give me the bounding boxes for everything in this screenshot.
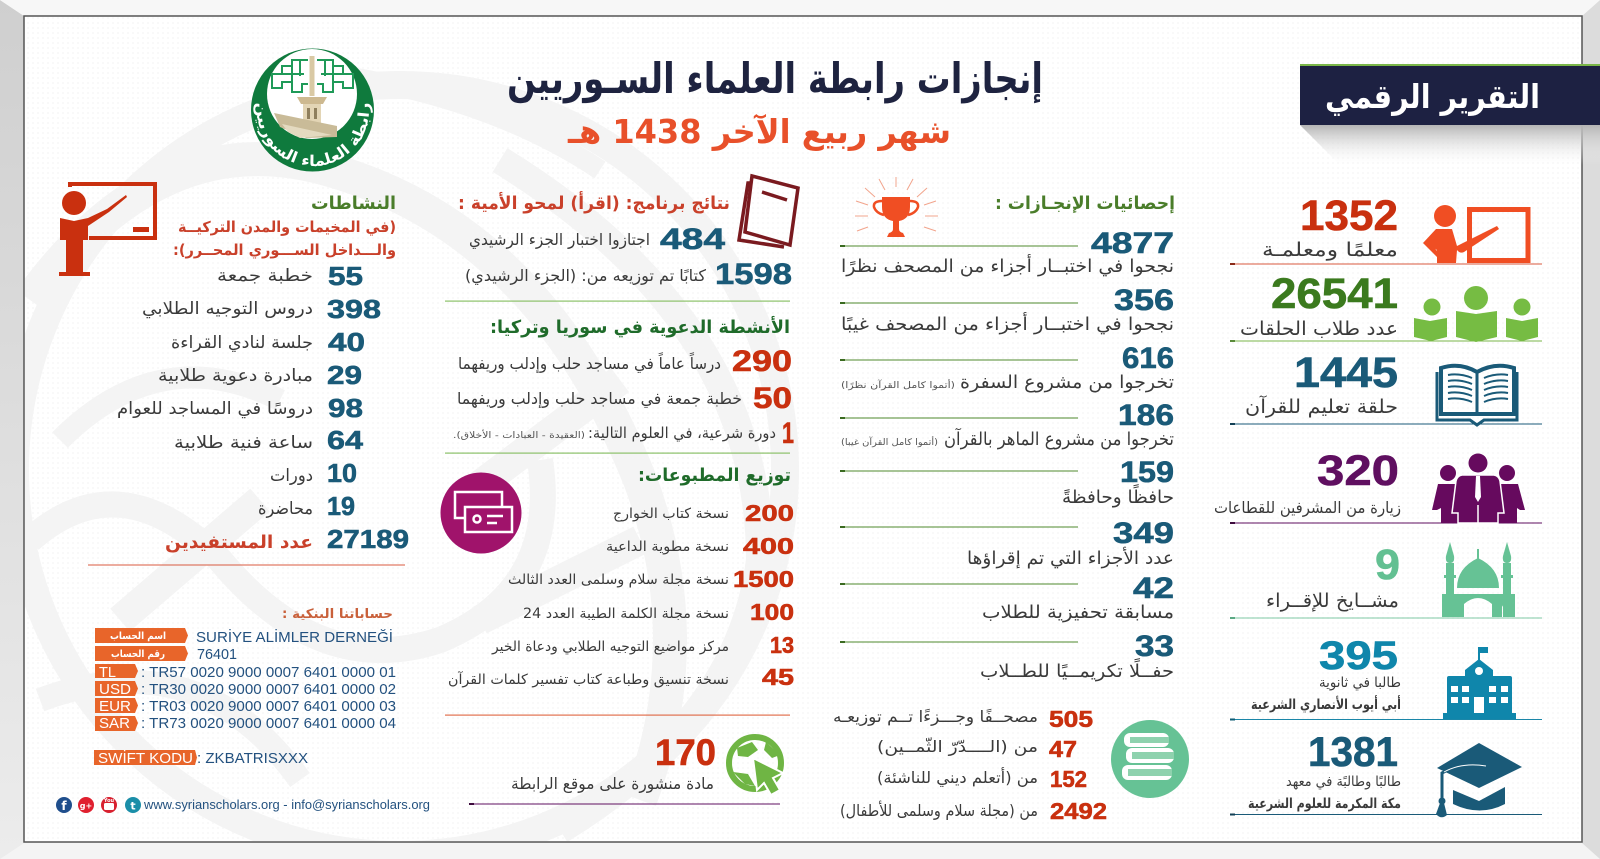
IBAN SAR: : TR73 0020 9000 0007 6401 0000 04 xyxy=(141,715,396,732)
panel: outreach activities xyxy=(445,316,794,454)
IBAN EUR: : TR03 0020 9000 0007 6401 0000 03 xyxy=(141,698,396,715)
row 400 xyxy=(606,533,794,559)
icon: google plus xyxy=(78,797,94,813)
row 2492: 2492 xyxy=(1050,798,1107,824)
row 1598 xyxy=(465,258,792,291)
row 45 xyxy=(448,664,794,690)
IBAN TL: : TR57 0020 9000 0007 6401 0000 01 xyxy=(141,664,396,681)
row 2492 xyxy=(840,798,1107,824)
row 186: 186 xyxy=(1118,399,1174,432)
row 10: 10 xyxy=(327,458,357,488)
panel: key figures (right column) xyxy=(1214,192,1542,817)
row 290: 290 xyxy=(732,345,792,378)
stat: institute students: طالبًا وطالبًة في معهد xyxy=(1286,774,1401,790)
panel: website articles: مادة منشورة على موقع الرابطة xyxy=(511,774,714,794)
row 42 xyxy=(840,572,1174,623)
row 4877: نجحوا في اختبــار أجزاء من المصحف نظرًا xyxy=(841,254,1174,277)
row 1: دورة شرعية، في العلوم التالية: xyxy=(588,424,776,443)
row 45: نسخة تنسيق وطباعة كتاب تفسير كلمات القرآن xyxy=(448,671,729,688)
row 29: 29 xyxy=(327,360,362,390)
row 1500 xyxy=(508,566,794,592)
IBAN EUR: EUR xyxy=(99,698,131,715)
stat: teachers: 1352 xyxy=(1300,192,1398,240)
icon: cards xyxy=(440,472,522,554)
row 4877: 4877 xyxy=(1091,227,1174,260)
row 349: 349 xyxy=(1113,517,1174,550)
heading: نتائج برنامج: (اقرأ) لمحو الأمية : xyxy=(458,191,730,214)
row 98 xyxy=(117,393,363,423)
icon: twitter: t xyxy=(130,800,136,812)
row 55: خطبة جمعة xyxy=(217,266,313,286)
panel: literacy program results xyxy=(445,176,798,302)
stat: Quran circles xyxy=(1230,349,1542,425)
account name value: SURİYE ALİMLER DERNEĞİ xyxy=(196,628,393,646)
badge: account name xyxy=(95,628,188,643)
icon: youtube xyxy=(101,797,117,813)
row 200: 200 xyxy=(745,500,794,526)
row 100: نسخة مجلة الكلمة الطيبة العدد 24 xyxy=(523,606,729,622)
icon: facebook xyxy=(56,797,72,813)
row 484 xyxy=(469,223,725,256)
banner: digital report xyxy=(1300,64,1600,165)
badge: account number: رقم الحساب xyxy=(111,649,165,660)
row 349: عدد الأجزاء التي تم إقراؤها xyxy=(967,547,1174,569)
row 29: مبادرة دعوية طلابية xyxy=(158,366,313,386)
row 10: دورات xyxy=(270,466,313,486)
panel: activities xyxy=(59,182,409,566)
row 13: 13 xyxy=(770,632,794,658)
row 1598: كتابًا تم توزيعه من: (الجزء الرشيدي) xyxy=(465,266,706,286)
stat: students: عدد طلاب الحلقات xyxy=(1240,318,1398,340)
row 349 xyxy=(840,517,1174,569)
row 98: دروسًا في المساجد للعوام xyxy=(117,399,313,419)
row 290 xyxy=(458,345,792,378)
row 616: 616 xyxy=(1122,342,1174,375)
row 1500: نسخة مجلة سلام وسلمى العدد الثالث xyxy=(508,572,729,588)
IBAN USD: USD xyxy=(99,681,131,698)
heading: إحصائيات الإنجـازات : xyxy=(995,193,1175,214)
icon: readers xyxy=(1414,286,1538,342)
row 33: 33 xyxy=(1135,630,1174,663)
row 186: (أتموا كامل القرآن غيبا) xyxy=(841,436,938,448)
row 50: خطبة جمعة في مساجد حلب وإدلب وريفهما xyxy=(457,389,742,409)
row 47: 47 xyxy=(1049,736,1077,762)
SWIFT code: : ZKBATRISXXX xyxy=(197,750,308,767)
row 27189 beneficiaries: 27189 xyxy=(327,524,409,554)
icon: facebook: f xyxy=(61,799,67,813)
banner: digital report: التقرير الرقمي xyxy=(1325,77,1540,117)
row 10 xyxy=(270,458,357,488)
row 100 xyxy=(523,599,794,625)
row 186: تخرجوا من مشروع الماهر بالقرآن xyxy=(944,427,1174,450)
heading: توزيع المطبوعات: xyxy=(638,465,791,486)
icon: twitter xyxy=(125,797,141,813)
icon: youtube: You xyxy=(103,798,115,804)
row 42: 42 xyxy=(1133,572,1174,605)
stat: high school students: 395 xyxy=(1319,634,1398,678)
stat: sheikhs: مشــايخ للإقــراء xyxy=(1266,590,1399,612)
icon: school xyxy=(1443,647,1516,719)
row 356: نجحوا في اختبــار أجزاء من المصحف غيبًا xyxy=(841,312,1174,335)
row 356: 356 xyxy=(1114,284,1174,317)
row 64: 64 xyxy=(327,425,364,455)
row 1: (العقيدة - العبادات - الأخلاق). xyxy=(453,429,585,441)
row 398: 398 xyxy=(327,294,381,324)
row 484: 484 xyxy=(660,223,725,256)
IBAN SAR: SAR xyxy=(99,715,130,732)
row 400: نسخة مطوية الداعية xyxy=(606,539,729,555)
panel: bank accounts xyxy=(94,607,396,767)
row 13 xyxy=(491,632,794,658)
row 200 xyxy=(613,500,794,526)
row 1: 1 xyxy=(782,417,794,450)
panel: website articles: 170 xyxy=(655,732,716,773)
row 4877 xyxy=(840,227,1174,277)
row 19: 19 xyxy=(327,491,355,521)
row 47 xyxy=(877,736,1077,762)
row 33 xyxy=(840,630,1174,682)
icon: teacher at board xyxy=(1423,205,1530,263)
row 55 xyxy=(217,261,363,291)
stat: students xyxy=(1230,270,1542,342)
row 50 xyxy=(457,382,792,415)
row 42: مسابقة تحفيزية للطلاب xyxy=(982,602,1174,623)
stat: Quran circles: حلقة تعليم للقرآن xyxy=(1245,394,1398,418)
stat: high school students: طالبا في ثانوية xyxy=(1319,675,1401,691)
row 64: ساعة فنية طلابية xyxy=(174,433,313,453)
title: إنجازات رابطة العلماء السـوريين xyxy=(507,54,1043,104)
panel: website articles xyxy=(469,732,780,805)
row 290: درساً عاماً في مساجد حلب وإدلب وريفهما xyxy=(458,351,721,374)
row 40 xyxy=(171,327,365,357)
stat: students: 26541 xyxy=(1271,270,1398,318)
stat: teachers xyxy=(1230,192,1542,265)
watermark xyxy=(15,70,785,855)
icon: open book xyxy=(1437,366,1517,425)
row 33: حفــلًا تكريمــيًا للطــلاب xyxy=(980,658,1174,682)
icon: graduation cap xyxy=(1436,743,1522,817)
panel: Quran distribution xyxy=(833,706,1189,824)
subtitle: شهر ربيع الآخر 1438 هـ xyxy=(567,112,951,152)
row 159 xyxy=(840,456,1174,508)
row 616: تخرجوا من مشروع السفرة xyxy=(960,372,1174,393)
stat: supervisor visits xyxy=(1214,447,1542,524)
icon: google plus: g+ xyxy=(80,802,92,810)
heading: الأنشطة الدعوية في سوريا وتركيا: xyxy=(490,316,790,338)
row 27189 beneficiaries: عدد المستفيدين xyxy=(165,532,313,553)
row 40: 40 xyxy=(328,327,365,357)
row 98: 98 xyxy=(328,393,363,423)
subheading: (في المخيمات والمدن التركيــة xyxy=(178,218,396,236)
row 2492: من (مجلة سلام وسلمى للأطفال) xyxy=(840,800,1038,821)
row 13: مركز مواضيع التوجيه الطلابي ودعاة الخير xyxy=(491,639,729,655)
row 47: من (الــــدّرّ الثّمــين) xyxy=(877,736,1038,757)
badge: account name: اسم الحساب xyxy=(110,631,166,642)
subheading line 2: والـــداخل الســـوري المحــرر): xyxy=(173,241,396,260)
stat: sheikhs xyxy=(1230,541,1542,619)
stat: institute students: 1381 xyxy=(1308,728,1398,775)
stat: Quran circles: 1445 xyxy=(1294,349,1398,397)
row 159: حافظًا وحافظةً xyxy=(1062,484,1174,508)
row 40: جلسة لنادي القراءة xyxy=(171,333,313,353)
stat: high school students xyxy=(1230,634,1542,720)
row 505 xyxy=(833,706,1093,732)
row 159: 159 xyxy=(1120,456,1174,489)
row 152 xyxy=(877,766,1087,792)
heading: حساباتنا البنكية : xyxy=(282,607,393,622)
row 19: محاضرة xyxy=(258,499,313,519)
row 356 xyxy=(840,284,1174,335)
icon: trophy xyxy=(855,177,938,237)
icon: teacher with pointer xyxy=(59,182,157,276)
row 484: اجتازوا اختبار الجزء الرشيدي xyxy=(469,230,650,250)
row 27189 beneficiaries xyxy=(165,524,409,554)
SWIFT code xyxy=(94,749,308,767)
social icons and contact xyxy=(56,797,430,813)
stat: supervisor visits: زيارة من المشرفين للقطاعات xyxy=(1214,498,1401,518)
row 398 xyxy=(142,294,381,324)
row 398: دروس التوجيه الطلابي xyxy=(142,299,313,319)
row 45: 45 xyxy=(762,664,794,690)
row 152: 152 xyxy=(1050,766,1087,792)
icon: group of people xyxy=(1432,454,1525,523)
SWIFT code: SWİFT KODU xyxy=(98,749,193,767)
heading: النشاطات xyxy=(311,193,396,214)
icon: globe with cursor xyxy=(729,737,783,795)
stat: supervisor visits: 320 xyxy=(1317,447,1399,495)
row 1 xyxy=(453,417,794,450)
IBAN TL: TL xyxy=(99,664,116,681)
row 50: 50 xyxy=(753,382,792,415)
stat: teachers: معلمًا ومعلمـة xyxy=(1262,239,1398,261)
row 186 xyxy=(840,399,1174,450)
panel: printed materials xyxy=(440,465,794,716)
panel: achievements statistics xyxy=(840,177,1175,682)
icon: notebook xyxy=(739,176,798,247)
stat: high school students: أبي أيوب الأنصاري الشرعية xyxy=(1251,695,1401,714)
IBAN USD: : TR30 0020 9000 0007 6401 0000 02 xyxy=(141,681,396,698)
row 152: من (أتعلم ديني للناشئة) xyxy=(877,767,1038,788)
row 1500: 1500 xyxy=(733,566,794,592)
row 100: 100 xyxy=(750,599,794,625)
contact text: www.syrianscholars.org - info@syrianscholars.org xyxy=(143,797,430,812)
row 55: 55 xyxy=(328,261,363,291)
minaret and roof xyxy=(274,56,337,138)
stat: institute students: مكة المكرمة للعلوم الشرعية xyxy=(1248,796,1401,812)
account number value: 76401 xyxy=(197,646,237,663)
tree xyxy=(272,60,353,92)
row 616: (أتموا كامل القرآن نظرًا) xyxy=(841,379,955,391)
row 505: 505 xyxy=(1049,706,1093,732)
icon: stack of books xyxy=(1111,720,1189,798)
row 505: مصحــفًا وجـــزءًا تــم توزيعـه xyxy=(833,707,1038,727)
row 1598: 1598 xyxy=(715,258,792,291)
stat: institute students xyxy=(1230,728,1542,816)
logo calligraphy: رابطة العلماء السوريين xyxy=(253,104,373,166)
row 400: 400 xyxy=(743,533,794,559)
row 616 xyxy=(840,342,1174,393)
row 64 xyxy=(174,425,364,455)
badge: account number xyxy=(95,646,188,661)
logo xyxy=(251,48,374,172)
row 19 xyxy=(258,491,355,521)
icon: mosque xyxy=(1442,542,1515,617)
row 200: نسخة كتاب الخوارج xyxy=(613,506,729,522)
stat: sheikhs: 9 xyxy=(1375,541,1400,589)
row 29 xyxy=(158,360,362,390)
